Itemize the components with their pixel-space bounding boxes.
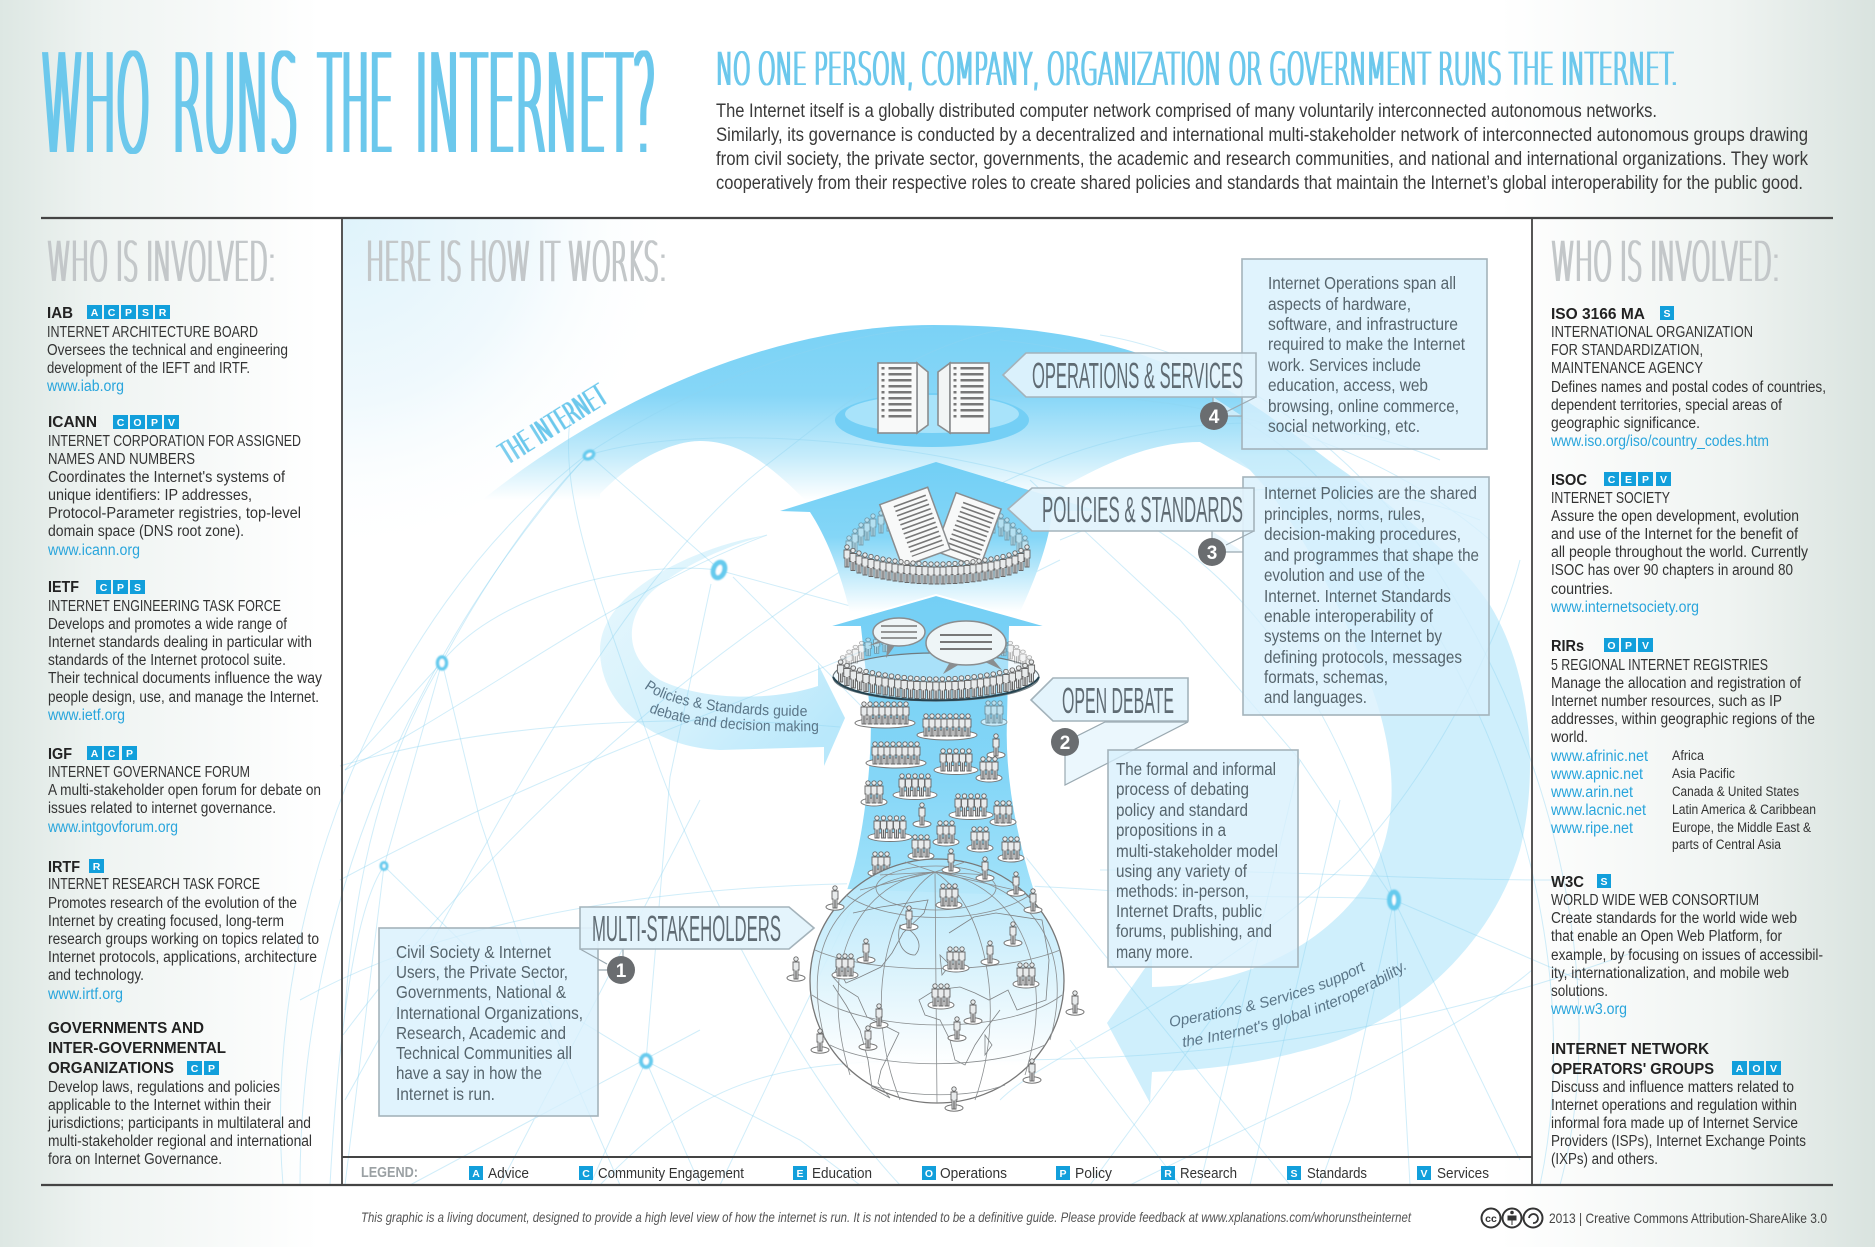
title: WHO bbox=[41, 26, 150, 185]
entry: internet network operators groups: informal fora made up of Internet Service bbox=[1551, 1115, 1798, 1132]
policies text box: Internet Policies are the shared bbox=[1264, 483, 1477, 503]
arrow: policies and standards bbox=[780, 462, 1098, 612]
entry: governments: ORGANIZATIONS bbox=[48, 1060, 174, 1077]
entry: IETF: INTERNET ENGINEERING TASK FORCE bbox=[48, 598, 281, 615]
badges: governments: P bbox=[208, 1063, 215, 1075]
curve text: the internet: THE INTERNET bbox=[494, 379, 614, 472]
badges: IAB: C bbox=[108, 307, 116, 319]
icon: debate platform bbox=[833, 653, 1039, 701]
icon: globe bbox=[810, 859, 1064, 1103]
entry: ISO 3166 MA: dependent territories, special areas of bbox=[1551, 397, 1783, 414]
entry: IGF bbox=[47, 746, 321, 836]
entry: ICANN: Protocol-Parameter registries, top-level bbox=[48, 505, 301, 522]
curve text: policies guide debate bbox=[644, 680, 818, 734]
left white blob bbox=[601, 441, 798, 494]
stakeholders text box: Users, the Private Sector, bbox=[396, 962, 568, 982]
entry: ICANN: www.icann.org bbox=[47, 542, 140, 559]
badges: operators: O bbox=[1752, 1063, 1761, 1075]
entry: IETF: Internet standards dealing in particular with bbox=[48, 634, 312, 651]
entry: governments: INTER-GOVERNMENTAL bbox=[48, 1040, 226, 1057]
registry table: www.ripe.net bbox=[1550, 820, 1634, 837]
badges: IGF: P bbox=[126, 748, 133, 760]
entry: governments: multi-stakeholder regional and international bbox=[48, 1133, 312, 1150]
badges: RIRs: P bbox=[1625, 640, 1632, 652]
network lines bbox=[280, 327, 1640, 1185]
entry: W3C: Create standards for the world wide web bbox=[1551, 910, 1797, 927]
debate text box: using any variety of bbox=[1116, 861, 1247, 881]
entry: IGF: A multi-stakeholder open forum for debate on bbox=[48, 782, 321, 799]
left swoosh arrow bbox=[600, 535, 845, 766]
entry: W3C: www.w3.org bbox=[1550, 1001, 1627, 1018]
callout: multi-stakeholders bbox=[379, 907, 814, 1116]
entry: IGF: IGF bbox=[48, 746, 72, 763]
debate text box: many more. bbox=[1116, 942, 1193, 962]
entry: IAB bbox=[46, 305, 288, 395]
badges: operators: V bbox=[1770, 1063, 1777, 1075]
panel: right organizations bbox=[1550, 306, 1826, 1168]
legend: A bbox=[472, 1168, 480, 1180]
badges: IAB: S bbox=[142, 307, 149, 319]
operations text box: education, access, web bbox=[1268, 375, 1428, 395]
operations text box: aspects of hardware, bbox=[1268, 294, 1411, 314]
stakeholders text box: Civil Society & Internet bbox=[396, 942, 551, 962]
entry: W3C: that enable an Open Web Platform, for bbox=[1551, 928, 1782, 945]
entry: IRTF: Internet by creating focused, long-term bbox=[48, 913, 284, 930]
registry table: Europe, the Middle East & bbox=[1672, 820, 1811, 835]
stakeholders text box: Governments, National & bbox=[396, 982, 566, 1002]
entry: ICANN: ICANN bbox=[48, 414, 97, 431]
license text: 2013 | Creative Commons Attribution-ShareAlike 3.0 bbox=[1549, 1210, 1827, 1226]
callout: policies and standards: POLICIES & STANDARDS bbox=[1042, 489, 1243, 530]
entry: ISO 3166 MA bbox=[1550, 306, 1826, 450]
entry: IETF: IETF bbox=[48, 579, 79, 596]
registry table: Asia Pacific bbox=[1672, 766, 1735, 781]
icon: creative commons badges bbox=[1482, 1208, 1542, 1228]
legend bbox=[361, 1165, 1489, 1182]
badges: operators bbox=[1732, 1061, 1781, 1075]
operations text box bbox=[1242, 259, 1487, 449]
entry: ISO 3166 MA: MAINTENANCE AGENCY bbox=[1551, 360, 1703, 377]
debate text box: forums, publishing, and bbox=[1116, 921, 1272, 941]
debate text box: Internet Drafts, public bbox=[1116, 901, 1262, 921]
text: INTERNET? bbox=[415, 26, 656, 185]
legend: C bbox=[582, 1168, 590, 1180]
entry: RIRs: Internet number resources, such as IP bbox=[1551, 693, 1782, 710]
entry: IRTF: research groups working on topics related to bbox=[48, 931, 319, 948]
badge: W3C: S bbox=[1600, 876, 1608, 888]
badges: IETF: P bbox=[117, 582, 124, 594]
badges: ISOC: V bbox=[1660, 474, 1667, 486]
entry: governments bbox=[47, 1020, 312, 1168]
continents bbox=[833, 900, 1049, 1098]
policies text box bbox=[1243, 477, 1489, 715]
badges: IGF bbox=[87, 746, 137, 760]
entry: ISOC: and use of the Internet for the benefit of bbox=[1551, 526, 1799, 543]
badges: IAB bbox=[87, 305, 170, 319]
entry: W3C: solutions. bbox=[1551, 983, 1608, 1000]
debate text box: propositions in a bbox=[1116, 820, 1226, 840]
operations text box: required to make the Internet bbox=[1268, 334, 1465, 354]
registry table bbox=[1550, 748, 1816, 852]
registry table: Latin America & Caribbean bbox=[1672, 802, 1816, 817]
footer disclaimer: This graphic is a living document, designed to provide a high level view of how the internet is run. It is not intended to be a definitive guide. Please provide feedback at www.xplanations.com/whorunstheinternet bbox=[361, 1209, 1412, 1225]
icon: operations ring platform bbox=[835, 393, 1029, 447]
registry table: www.arin.net bbox=[1550, 784, 1634, 801]
entry: IAB: IAB bbox=[47, 305, 73, 322]
badge: IRTF bbox=[89, 859, 104, 873]
callout: open debate bbox=[1031, 678, 1298, 967]
entry: IRTF: and technology. bbox=[48, 967, 144, 984]
entry: internet network operators groups bbox=[1551, 1041, 1806, 1168]
policies text box: and programmes that shape the bbox=[1264, 545, 1479, 565]
entry: governments: jurisdictions; participants in multilateral and bbox=[47, 1115, 311, 1132]
badges: IGF: A bbox=[91, 748, 99, 760]
entry: IGF: INTERNET GOVERNANCE FORUM bbox=[48, 764, 250, 781]
entry: ISO 3166 MA: INTERNATIONAL ORGANIZATION bbox=[1551, 324, 1753, 341]
badges: IAB: A bbox=[91, 307, 99, 319]
entry: internet network operators groups: Providers (ISPs), Internet Exchange Points bbox=[1551, 1133, 1806, 1150]
icon: creative commons badges: cc bbox=[1485, 1213, 1497, 1225]
registry table: www.apnic.net bbox=[1550, 766, 1644, 783]
entry: ICANN bbox=[47, 414, 301, 559]
entry: ISO 3166 MA: www.iso.org/iso/country_codes.htm bbox=[1550, 433, 1769, 450]
legend: V bbox=[1420, 1168, 1428, 1180]
badges: operators: A bbox=[1736, 1063, 1744, 1075]
policies tag bbox=[1008, 488, 1254, 552]
legend: Operations bbox=[940, 1165, 1007, 1182]
policies text box: formats, schemas, bbox=[1264, 667, 1388, 687]
entry: IGF: www.intgovforum.org bbox=[47, 819, 178, 836]
entry: IAB: www.iab.org bbox=[46, 378, 124, 395]
badges: RIRs: V bbox=[1642, 640, 1649, 652]
entry: internet network operators groups: OPERATORS' GROUPS bbox=[1551, 1061, 1714, 1078]
entry: ISOC: Assure the open development, evolution bbox=[1551, 508, 1799, 525]
callout: operations and services bbox=[1003, 259, 1487, 449]
policies text box: and languages. bbox=[1264, 687, 1367, 707]
badges: IETF: S bbox=[134, 582, 141, 594]
registry table: Canada & United States bbox=[1672, 784, 1799, 799]
entry: ISOC: ISOC has over 90 chapters in around 80 bbox=[1551, 562, 1793, 579]
debate text box: policy and standard bbox=[1116, 800, 1248, 820]
title: RUNS bbox=[172, 26, 298, 185]
stakeholders text box: Research, Academic and bbox=[396, 1023, 566, 1043]
center panel background bbox=[343, 219, 1532, 1157]
badges: IETF: C bbox=[100, 582, 108, 594]
entry: ICANN: NAMES AND NUMBERS bbox=[48, 451, 195, 468]
legend: Services bbox=[1437, 1165, 1489, 1182]
policies text box: enable interoperability of bbox=[1264, 606, 1433, 626]
policies text box: principles, norms, rules, bbox=[1264, 504, 1425, 524]
registry table: www.afrinic.net bbox=[1550, 748, 1649, 765]
debate text box: process of debating bbox=[1116, 779, 1249, 799]
badge: W3C bbox=[1597, 874, 1611, 888]
legend: LEGEND: bbox=[361, 1165, 418, 1181]
badges: IETF bbox=[96, 580, 145, 594]
right white blob bbox=[1064, 442, 1255, 488]
crowd ring: policies front bbox=[844, 545, 1030, 584]
entry: ICANN: unique identifiers: IP addresses, bbox=[48, 487, 252, 504]
entry: ISO 3166 MA: ISO 3166 MA bbox=[1551, 306, 1645, 323]
number 1: 1 bbox=[616, 961, 627, 982]
operations text box: Internet Operations span all bbox=[1268, 273, 1456, 293]
policies text box: defining protocols, messages bbox=[1264, 647, 1462, 667]
entry: RIRs: RIRs bbox=[1551, 638, 1584, 655]
entry: ISOC: www.internetsociety.org bbox=[1550, 599, 1699, 616]
entry: ISOC: countries. bbox=[1551, 581, 1613, 598]
debate text box: multi-stakeholder model bbox=[1116, 841, 1278, 861]
legend: Research bbox=[1180, 1165, 1237, 1182]
internet cap bbox=[492, 325, 1328, 494]
entry: IRTF: www.irtf.org bbox=[47, 986, 123, 1003]
entry: ISO 3166 MA: FOR STANDARDIZATION, bbox=[1551, 342, 1703, 359]
badges: ISOC: E bbox=[1625, 474, 1632, 486]
intro paragraph bbox=[716, 100, 1808, 194]
legend: Policy bbox=[1075, 1165, 1112, 1182]
entry: governments: applicable to the Internet within their bbox=[48, 1097, 271, 1114]
legend: Standards bbox=[1307, 1165, 1367, 1182]
badge: ISO: S bbox=[1663, 308, 1671, 320]
debate tag bbox=[1031, 678, 1188, 721]
entry: W3C: example, by focusing on issues of accessibil- bbox=[1551, 947, 1823, 964]
badges: IAB: P bbox=[125, 307, 132, 319]
text: HERE IS HOW IT WORKS: bbox=[366, 230, 667, 294]
registry table: parts of Central Asia bbox=[1672, 837, 1781, 852]
entry: internet network operators groups: (IXPs) and others. bbox=[1551, 1151, 1658, 1168]
badges: RIRs: O bbox=[1607, 640, 1616, 652]
entry: IETF: Their technical documents influence the way bbox=[48, 670, 322, 687]
policies text box: systems on the Internet by bbox=[1264, 626, 1442, 646]
entry: ISO 3166 MA: Defines names and postal codes of countries, bbox=[1551, 379, 1826, 396]
entry: IAB: INTERNET ARCHITECTURE BOARD bbox=[47, 324, 258, 341]
intro paragraph: The Internet itself is a globally distributed computer network comprised of many voluntarily interconnected autonomous networks. bbox=[716, 100, 1657, 122]
number 2: 2 bbox=[1060, 733, 1070, 754]
entry: ISOC: INTERNET SOCIETY bbox=[1551, 490, 1670, 507]
badges: governments: C bbox=[191, 1063, 199, 1075]
panel frame lines bbox=[41, 218, 1833, 1185]
entry: governments: Develop laws, regulations and policies bbox=[48, 1079, 280, 1096]
number 3 bbox=[1198, 538, 1226, 566]
stakeholders text box: International Organizations, bbox=[396, 1003, 583, 1023]
entry: IAB: Oversees the technical and engineering bbox=[47, 342, 288, 359]
entry: W3C bbox=[1550, 874, 1823, 1018]
entry: RIRs: 5 REGIONAL INTERNET REGISTRIES bbox=[1551, 657, 1768, 674]
entry: ISOC: all people throughout the world. Currently bbox=[1551, 544, 1808, 561]
corner glow bbox=[343, 219, 843, 619]
entry: IAB: development of the IEFT and IRTF. bbox=[47, 360, 250, 377]
badges: ISOC bbox=[1604, 472, 1671, 486]
operations text box: software, and infrastructure bbox=[1268, 314, 1458, 334]
entry: IRTF: INTERNET RESEARCH TASK FORCE bbox=[48, 876, 260, 893]
curve text: operations support: Operations & Services support bbox=[1170, 962, 1366, 1028]
entry: IETF: Develops and promotes a wide range of bbox=[48, 616, 288, 633]
debate text box: methods: in-person, bbox=[1116, 881, 1249, 901]
legend: R bbox=[1164, 1168, 1172, 1180]
legend: Education bbox=[812, 1165, 872, 1182]
stakeholders on globe bbox=[787, 849, 1084, 1111]
badges: IGF: C bbox=[108, 748, 116, 760]
entry: internet network operators groups: Internet operations and regulation within bbox=[1551, 1097, 1797, 1114]
entry: IETF: www.ietf.org bbox=[47, 707, 125, 724]
policies text box: Internet. Internet Standards bbox=[1264, 586, 1451, 606]
stakeholders text box: Technical Communities all bbox=[396, 1043, 572, 1063]
entry: governments: fora on Internet Governance. bbox=[48, 1151, 222, 1168]
entry: RIRs: world. bbox=[1550, 729, 1588, 746]
badges: governments bbox=[187, 1061, 219, 1075]
badge: ISO bbox=[1660, 306, 1674, 320]
entry: W3C: ity, internationalization, and mobile web bbox=[1551, 965, 1789, 982]
entry: W3C: W3C bbox=[1551, 874, 1584, 891]
stakeholder groups bbox=[855, 701, 1024, 877]
title: THE bbox=[318, 26, 393, 185]
number 4: 4 bbox=[1209, 407, 1220, 428]
crowd ring: policies back bbox=[846, 509, 1028, 558]
callout: policies and standards bbox=[1008, 477, 1489, 715]
entry: internet network operators groups: INTERNET NETWORK bbox=[1551, 1041, 1709, 1058]
legend: S bbox=[1290, 1168, 1298, 1180]
stakeholders tag: MULTI-STAKEHOLDERS bbox=[592, 908, 781, 949]
entry: IETF: standards of the Internet protocol suite. bbox=[48, 652, 286, 669]
debate fold bbox=[1065, 722, 1188, 785]
badges: RIRs bbox=[1604, 638, 1653, 652]
panel: left organizations bbox=[46, 305, 322, 1168]
entry: IRTF: Promotes research of the evolution of the bbox=[48, 895, 297, 912]
entry: ISO 3166 MA: geographic significance. bbox=[1551, 415, 1700, 432]
operations text box: social networking, etc. bbox=[1268, 416, 1420, 436]
curve text: policies guide debate: debate and decision making bbox=[650, 704, 818, 734]
operations tag bbox=[1003, 353, 1256, 416]
legend: P bbox=[1059, 1168, 1067, 1180]
callout: open debate: OPEN DEBATE bbox=[1062, 680, 1174, 721]
badges: IAB: R bbox=[159, 307, 167, 319]
operations text box: browsing, online commerce, bbox=[1268, 396, 1459, 416]
right swoosh arrow bbox=[1107, 376, 1530, 1103]
entry: RIRs: addresses, within geographic regions of the bbox=[1551, 711, 1815, 728]
globe grid bbox=[812, 862, 1062, 1103]
badges: ISOC: C bbox=[1608, 474, 1616, 486]
crowd ring: debate back bbox=[840, 634, 1032, 673]
registry table: Africa bbox=[1672, 748, 1704, 763]
text: WHO IS INVOLVED: bbox=[47, 230, 276, 294]
stakeholders text box: Internet is run. bbox=[396, 1084, 495, 1104]
entry: IETF bbox=[47, 579, 322, 724]
entry: ICANN: Coordinates the Internet's systems of bbox=[48, 469, 286, 486]
legend: E bbox=[796, 1168, 804, 1180]
entry: IRTF: Internet protocols, applications, architecture bbox=[48, 949, 317, 966]
entry: governments: GOVERNMENTS AND bbox=[48, 1020, 204, 1037]
title bbox=[41, 26, 656, 185]
badges: ICANN: P bbox=[151, 417, 158, 429]
badges: ICANN: O bbox=[133, 417, 142, 429]
badges: ISOC: P bbox=[1642, 474, 1649, 486]
number 2 bbox=[1051, 728, 1079, 756]
network nodes bbox=[381, 449, 1398, 1067]
callout: operations and services: OPERATIONS & SERVICES bbox=[1032, 355, 1243, 396]
entry: IRTF: IRTF bbox=[48, 859, 80, 876]
legend: Advice bbox=[488, 1165, 529, 1182]
operations text box: work. Services include bbox=[1267, 355, 1421, 375]
policies text box: decision-making procedures, bbox=[1264, 524, 1461, 544]
entry: IRTF bbox=[47, 859, 319, 1003]
badges: ICANN: V bbox=[168, 417, 175, 429]
badge: IRTF: R bbox=[93, 861, 101, 873]
legend: O bbox=[925, 1168, 933, 1180]
diagram: blue internet forms bbox=[470, 325, 1530, 1103]
badges: ICANN bbox=[113, 415, 179, 429]
entry: ICANN: INTERNET CORPORATION FOR ASSIGNED bbox=[48, 433, 301, 450]
arrow: open debate bbox=[825, 595, 1050, 897]
badges: ICANN: C bbox=[117, 417, 125, 429]
debate text box bbox=[1108, 750, 1298, 967]
entry: internet network operators groups: Discuss and influence matters related to bbox=[1551, 1079, 1794, 1096]
stakeholders tag bbox=[580, 907, 814, 970]
number 3: 3 bbox=[1207, 543, 1217, 564]
entry: ICANN: domain space (DNS root zone). bbox=[48, 523, 244, 540]
legend: Community Engagement bbox=[598, 1165, 745, 1182]
stakeholders text box bbox=[379, 928, 598, 1116]
curve text: operations support: the Internet's global interoperability. bbox=[1182, 962, 1406, 1047]
entry: RIRs: Manage the allocation and registration of bbox=[1551, 675, 1802, 692]
entry: ISOC: ISOC bbox=[1551, 472, 1587, 489]
curve text: policies guide debate: Policies & Standards guide bbox=[644, 680, 807, 719]
debate text box: The formal and informal bbox=[1116, 759, 1276, 779]
entry: ISOC bbox=[1550, 472, 1808, 616]
entry: W3C: WORLD WIDE WEB CONSORTIUM bbox=[1551, 892, 1759, 909]
policies text box: evolution and use of the bbox=[1264, 565, 1425, 585]
number 4 bbox=[1200, 402, 1228, 430]
stakeholders text box: have a say in how the bbox=[396, 1063, 542, 1083]
icon: speech bubbles bbox=[868, 618, 1006, 674]
entry: IETF: people design, use, and manage the Internet. bbox=[48, 689, 319, 706]
icon: policy documents bbox=[880, 487, 1001, 567]
icon: servers bbox=[878, 363, 989, 433]
number 1 bbox=[607, 956, 635, 984]
entry: IGF: issues related to internet governance. bbox=[48, 800, 276, 817]
registry table: www.lacnic.net bbox=[1550, 802, 1647, 819]
crowd ring: debate front bbox=[837, 660, 1035, 699]
entry: RIRs bbox=[1550, 638, 1816, 852]
